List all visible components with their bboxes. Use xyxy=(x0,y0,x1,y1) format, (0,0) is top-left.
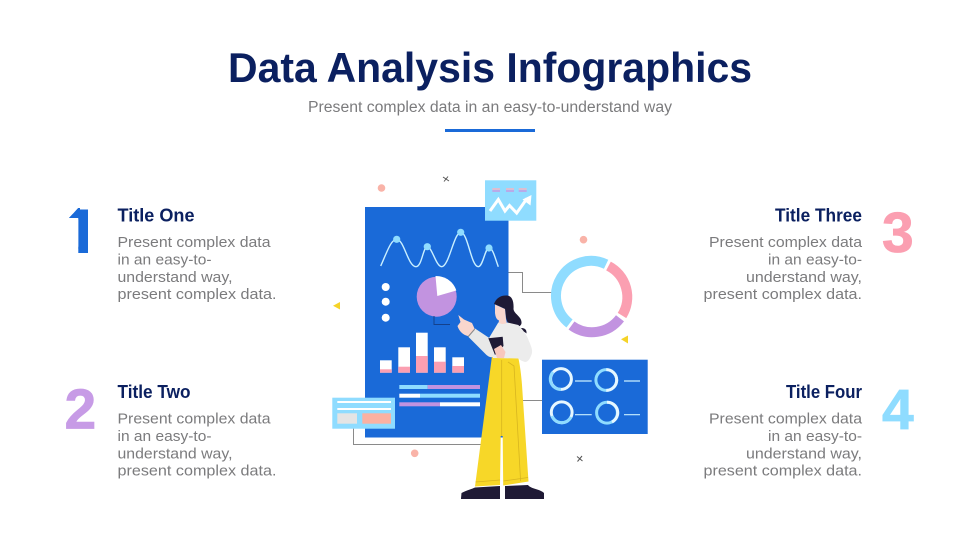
hair tip xyxy=(520,328,527,334)
character: woman presenting xyxy=(458,295,544,499)
hair xyxy=(494,295,522,327)
text block: title one: understand way, xyxy=(118,270,232,286)
number 3: 3 xyxy=(882,201,914,265)
decorative marks xyxy=(333,176,628,462)
text block: title four: present complex data. xyxy=(704,464,862,480)
text block: title three: in an easy-to- xyxy=(768,252,862,268)
text block: title two: Present complex data xyxy=(118,412,272,428)
number 1 xyxy=(69,208,88,253)
text block: title three xyxy=(704,206,863,303)
text block: title one: Title One xyxy=(118,206,194,226)
text block: title two xyxy=(118,382,276,480)
cuff xyxy=(468,329,474,336)
text block: title two: in an easy-to- xyxy=(118,429,212,445)
holding hand xyxy=(494,345,506,358)
card: lower left xyxy=(332,398,395,429)
subtitle: Present complex data in an easy-to-understand way xyxy=(308,99,672,116)
trouser creases xyxy=(476,360,528,482)
trousers xyxy=(475,356,528,486)
arm xyxy=(468,328,494,357)
text block: title three: understand way, xyxy=(746,270,862,286)
skin: face and neck xyxy=(495,304,508,326)
text block: title one: Present complex data xyxy=(118,235,272,251)
pointing hand xyxy=(458,315,474,336)
text block: title two: Title Two xyxy=(118,382,190,402)
text block: title four xyxy=(704,382,863,480)
panel: progress rings xyxy=(542,360,648,434)
shoes xyxy=(461,486,500,499)
text block: title three: Title Three xyxy=(775,206,862,226)
text block: title four: Present complex data xyxy=(709,412,863,428)
text block: title three: Present complex data xyxy=(709,235,863,251)
text block: title one xyxy=(118,206,276,303)
text block: title one: in an easy-to- xyxy=(118,252,212,268)
tablet xyxy=(488,337,504,355)
text block: title two: understand way, xyxy=(118,446,232,462)
panel: main dashboard xyxy=(365,207,508,438)
progress bars xyxy=(399,385,480,406)
text block: title four: understand way, xyxy=(746,446,862,462)
number 1: 1 xyxy=(64,198,100,268)
text block: title three: present complex data. xyxy=(704,287,862,303)
bar chart xyxy=(380,333,464,373)
connector lines xyxy=(354,272,552,444)
title underline xyxy=(445,129,535,132)
dot list xyxy=(382,283,390,322)
line chart xyxy=(381,229,498,267)
text block: title four: in an easy-to- xyxy=(768,429,862,445)
text block: title four: Title Four xyxy=(786,382,862,402)
number 2: 2 xyxy=(64,378,96,442)
text block: title two: present complex data. xyxy=(118,464,276,480)
pie chart xyxy=(417,276,457,324)
text block: title one: present complex data. xyxy=(118,287,276,303)
card: trend arrow xyxy=(485,180,536,221)
title: Data Analysis Infographics xyxy=(228,44,752,91)
donut chart xyxy=(556,261,627,332)
shirt xyxy=(489,322,532,362)
number 4: 4 xyxy=(882,378,914,442)
